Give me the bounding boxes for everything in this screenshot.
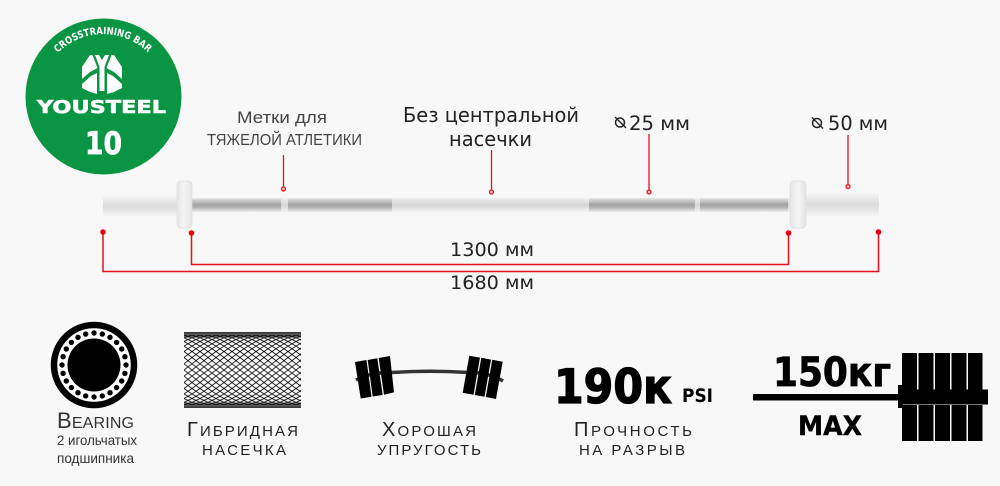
- dimension: 1680 mm: 1680 мм: [450, 272, 534, 294]
- logo wordmark: YOUSTEEL: [36, 97, 166, 118]
- label: hybrid knurl: [187, 419, 298, 459]
- right collar: [790, 181, 806, 228]
- callout: olympic marks: Метки для: [237, 108, 327, 127]
- callout: 50 mm diameter: 50 мм: [828, 112, 888, 135]
- dimension: 1680 mm: [100, 229, 881, 294]
- left sleeve: [103, 196, 179, 216]
- label: good flex: УПРУГОСТЬ: [377, 442, 481, 459]
- callout: olympic marks: ТЯЖЕЛОЙ АТЛЕТИКИ: [207, 130, 362, 149]
- icon: flexing barbell: [355, 356, 503, 399]
- stat: max load: [773, 350, 891, 442]
- label: bearing: BEARING: [57, 408, 134, 433]
- callout: no center knurl: Без центральной: [403, 103, 579, 127]
- icon: hybrid knurl swatch: [184, 332, 301, 408]
- label: hybrid knurl: НАСЕЧКА: [202, 442, 286, 459]
- stat: max load: MAX: [798, 411, 862, 442]
- knurl right: [589, 198, 695, 212]
- left collar: [177, 181, 192, 228]
- label: bearing: [57, 408, 137, 466]
- label: bearing: подшипника: [57, 450, 134, 466]
- label: good flex: ХОРОШАЯ: [382, 419, 476, 441]
- callout: olympic marks: [207, 108, 362, 191]
- shaft: [190, 198, 794, 212]
- stat: tensile strength: 190к: [554, 360, 672, 415]
- stat: tensile strength: PSI: [682, 385, 713, 407]
- label: tensile strength: [574, 419, 692, 459]
- callout: 50 mm diameter: [812, 112, 888, 188]
- label: tensile strength: НА РАЗРЫВ: [579, 442, 685, 459]
- callout: no center knurl: [403, 103, 579, 194]
- barbell illustration: [103, 181, 879, 228]
- callout: 25 mm diameter: [615, 112, 690, 194]
- dimension: 1300 mm: 1300 мм: [450, 239, 534, 261]
- logo model number: 10: [85, 126, 122, 162]
- label: hybrid knurl: ГИБРИДНАЯ: [187, 419, 298, 441]
- icon: max load barbell: [753, 353, 988, 441]
- logo badge: [26, 18, 182, 174]
- label: good flex: [377, 419, 481, 459]
- right sleeve: [804, 193, 879, 216]
- dimension: 1300 mm: [189, 230, 791, 264]
- logo arc text: CROSSTRAINING BAR: [54, 26, 152, 52]
- knurl left: [190, 198, 281, 212]
- callout: no center knurl: насечки: [449, 127, 532, 151]
- logo emblem: [82, 55, 122, 94]
- label: tensile strength: ПРОЧНОСТЬ: [574, 419, 692, 441]
- icon: bearing: [54, 325, 134, 405]
- stat: max load: 150кг: [773, 350, 891, 396]
- callout: 25 mm diameter: 25 мм: [629, 112, 690, 135]
- label: bearing: 2 игольчатых: [57, 432, 137, 448]
